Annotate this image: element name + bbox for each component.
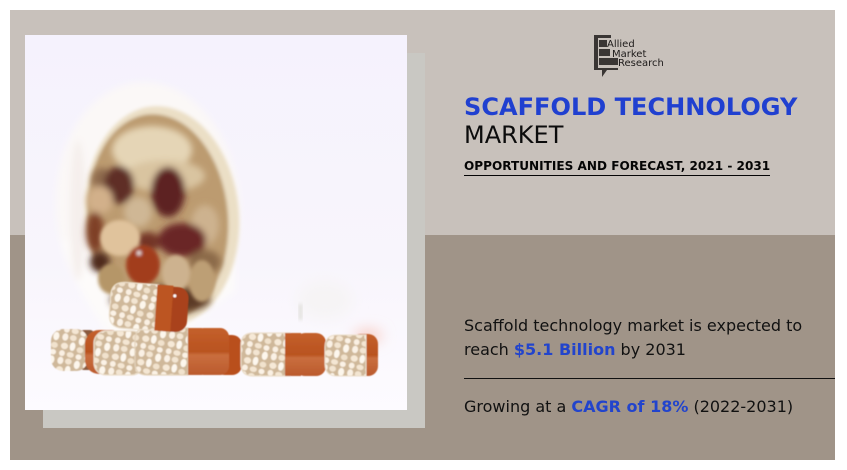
capsule: far left bbox=[51, 329, 94, 371]
text: market size: Scaffold technology market is expected to bbox=[464, 316, 802, 335]
title: SCAFFOLD TECHNOLOGY bbox=[464, 93, 797, 121]
logo wordmark: Market bbox=[612, 48, 646, 60]
forecast heading: OPPORTUNITIES AND FORECAST, 2021 - 2031 bbox=[464, 159, 770, 173]
logo wordmark: Allied bbox=[607, 39, 635, 50]
capsule: small orange bbox=[215, 335, 242, 375]
bottle opening bbox=[76, 100, 248, 332]
subtitle: market: MARKET bbox=[464, 121, 563, 149]
capsule row bbox=[51, 281, 378, 376]
capsule: second bbox=[85, 330, 144, 375]
panel: top background bbox=[10, 10, 835, 235]
capsule: right bbox=[241, 333, 326, 376]
logo wordmark bbox=[607, 39, 664, 69]
background blur shapes bbox=[297, 280, 382, 342]
capsule: top tilted bbox=[108, 281, 189, 333]
capsule: far right bbox=[325, 334, 378, 376]
capsule: centre bbox=[135, 328, 229, 375]
logo: Allied Market Research bbox=[594, 35, 664, 77]
logo icon bbox=[594, 35, 618, 77]
bottle body bbox=[47, 76, 249, 340]
panel: photo shadow block bbox=[43, 53, 425, 428]
panel: bottom background bbox=[10, 235, 835, 460]
logo wordmark: Research bbox=[618, 58, 664, 69]
pills inside bottle bbox=[86, 126, 221, 314]
text: market size: reach $5.1 Billion by 2031 bbox=[464, 340, 686, 359]
text: market size bbox=[464, 316, 802, 359]
text: CAGR: Growing at a CAGR of 18% (2022-2031) bbox=[464, 397, 793, 416]
photo: pill bottle and capsules bbox=[25, 35, 407, 410]
